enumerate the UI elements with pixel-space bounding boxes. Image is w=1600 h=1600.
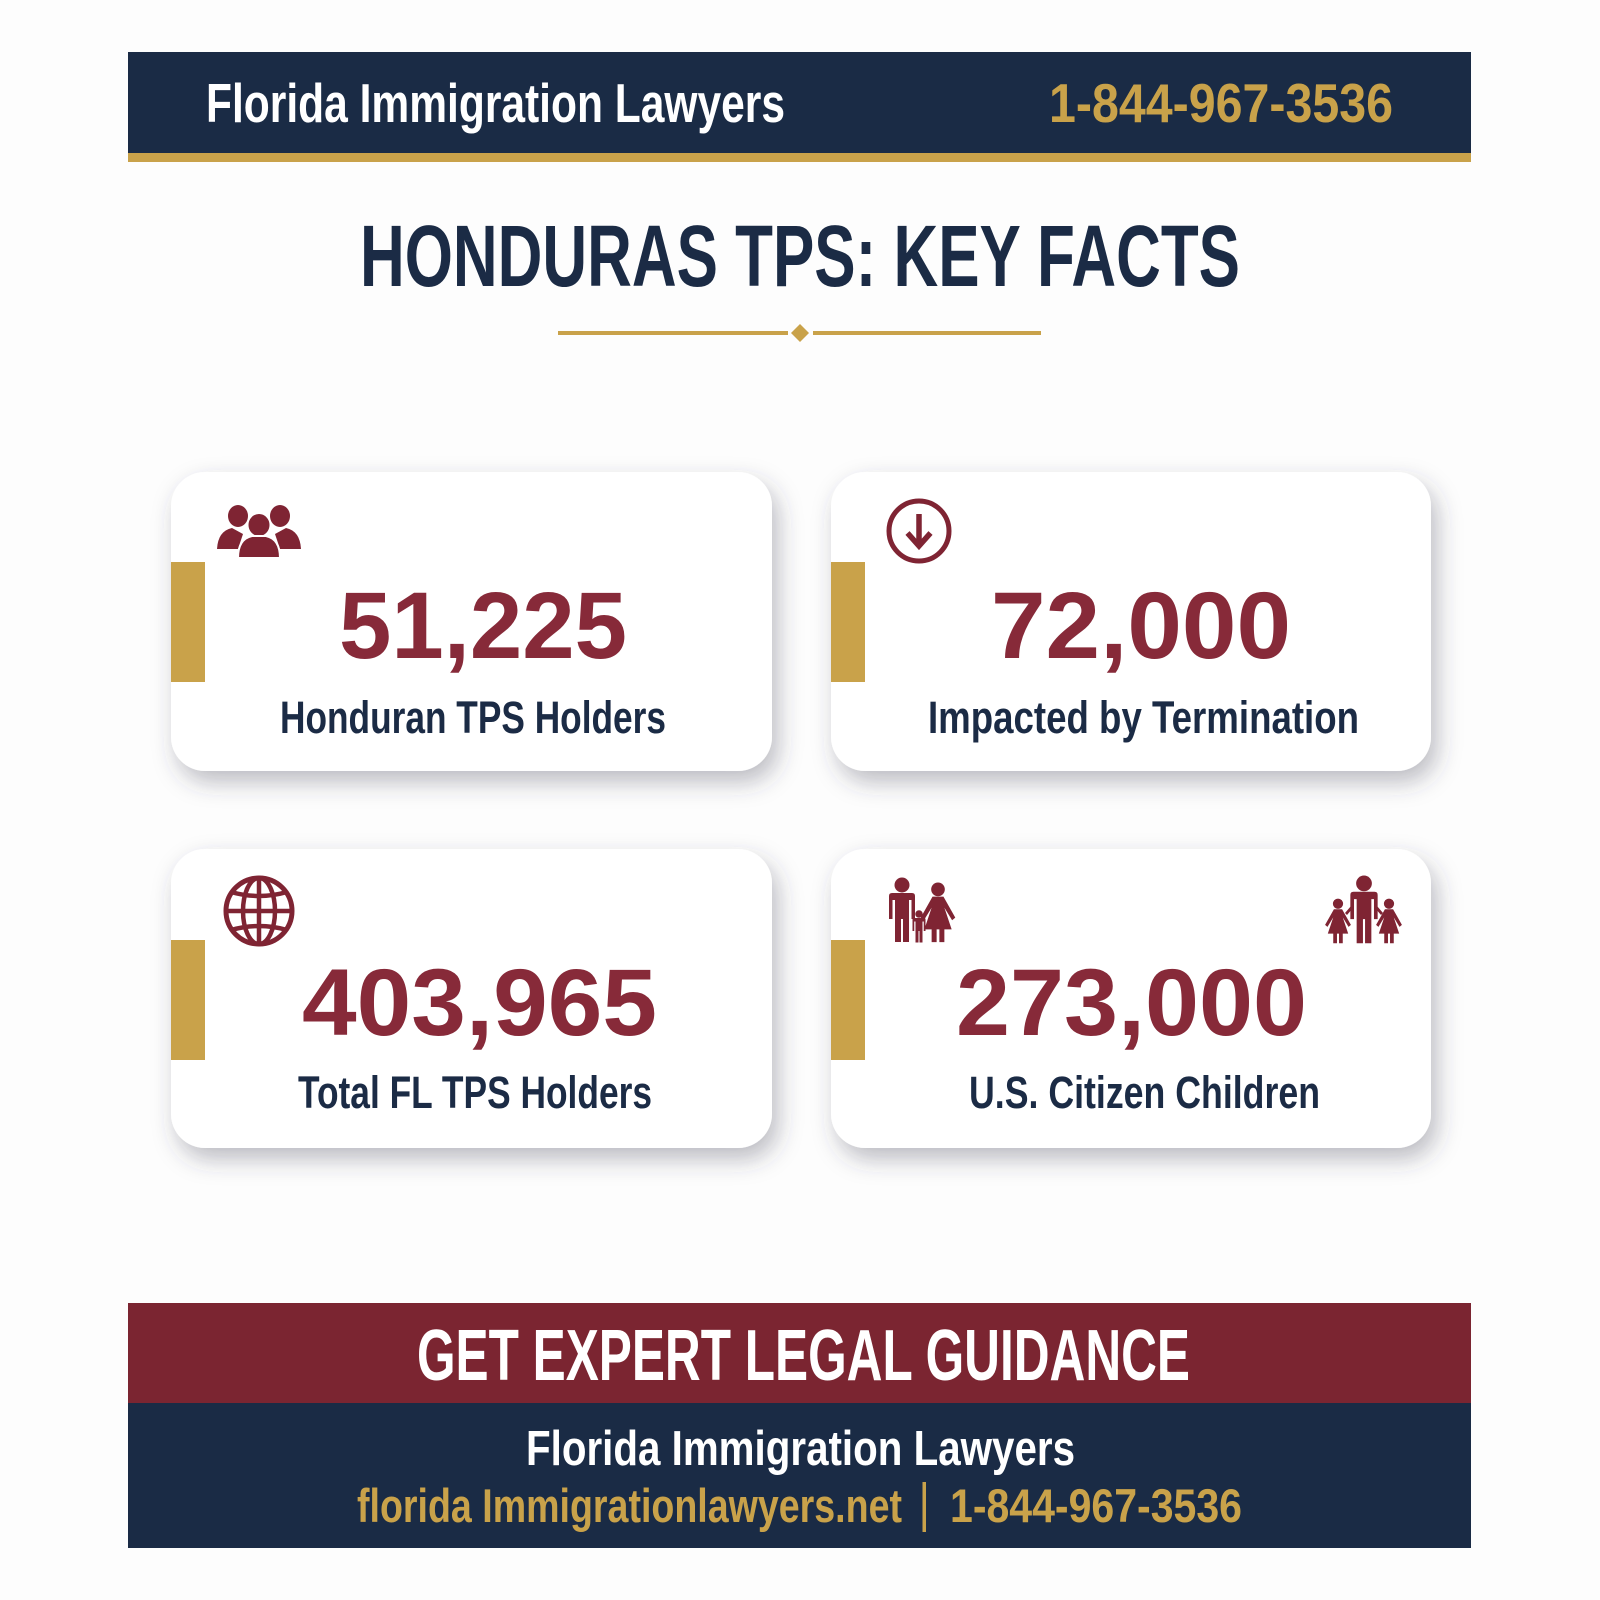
- title divider with diamond: [558, 324, 1041, 342]
- banner heading: GET EXPERT LEGAL GUIDANCE: [417, 1316, 1190, 1396]
- footer phone number: 1-844-967-3536: [950, 1479, 1242, 1532]
- call to action banner: [128, 1303, 1471, 1403]
- footer firm name: Florida Immigration Lawyers: [526, 1422, 1075, 1476]
- panel: Honduran TPS Holders: [171, 472, 772, 771]
- panel: Total FL TPS Holders: [171, 849, 772, 1148]
- icon: family left: [889, 878, 955, 942]
- title: HONDURAS TPS: KEY FACTS: [360, 208, 1240, 305]
- icon: group of people: [217, 505, 301, 558]
- icon: globe: [226, 878, 292, 944]
- label: Total FL TPS Holders: [298, 1067, 652, 1118]
- statistic: 273,000: [956, 950, 1307, 1056]
- header phone number: 1-844-967-3536: [1049, 72, 1393, 134]
- statistic: 51,225: [339, 573, 627, 679]
- footer website: florida Immigrationlawyers.net: [357, 1479, 902, 1532]
- panel: Impacted by Termination: [831, 472, 1431, 771]
- label: Impacted by Termination: [928, 692, 1359, 743]
- contact footer: [128, 1403, 1471, 1548]
- icon: down arrow in circle: [889, 501, 949, 561]
- header firm name: Florida Immigration Lawyers: [206, 72, 785, 134]
- statistic: 403,965: [302, 950, 657, 1056]
- panel: U.S. Citizen Children: [831, 849, 1431, 1148]
- label: U.S. Citizen Children: [969, 1067, 1320, 1118]
- statistic: 72,000: [991, 573, 1291, 679]
- header bar: [128, 52, 1471, 162]
- icon: family right: [1325, 876, 1402, 943]
- label: Honduran TPS Holders: [280, 692, 666, 743]
